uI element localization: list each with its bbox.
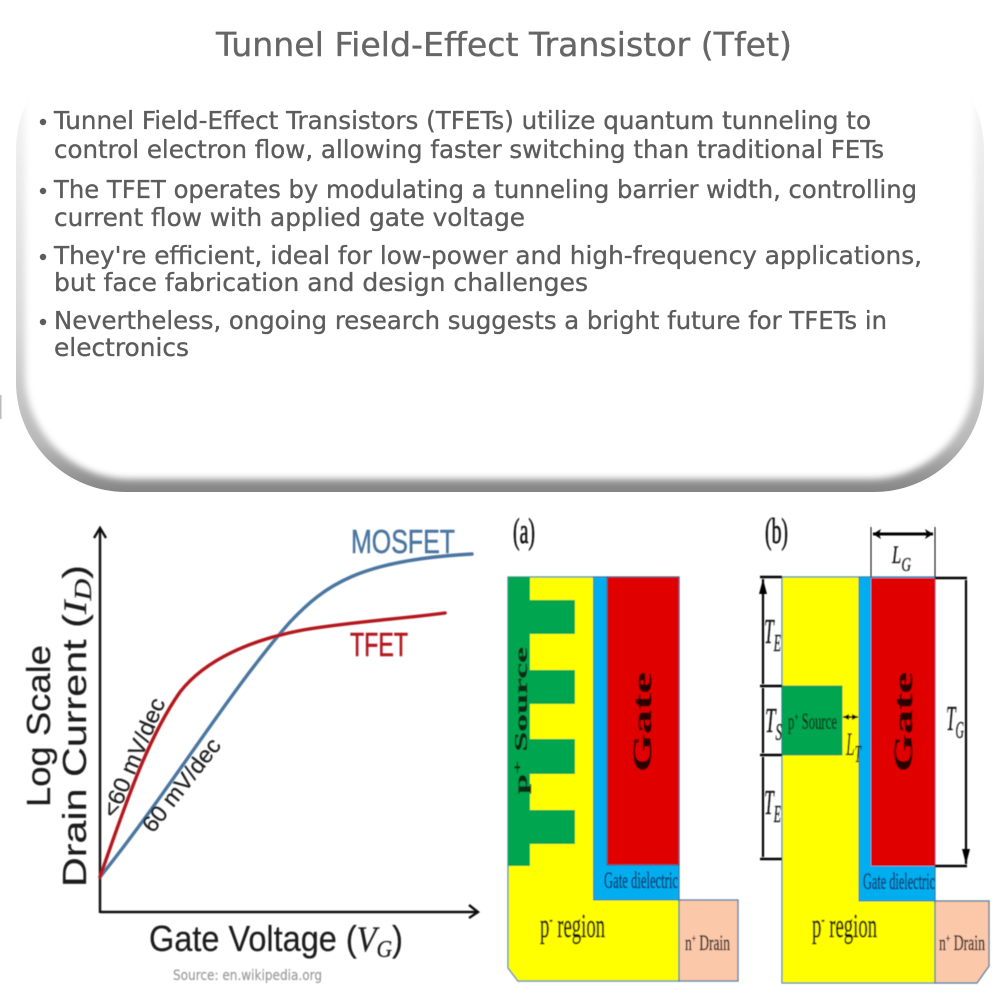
dimension: LG: L: [892, 542, 906, 569]
diagram: structure (a): [508, 511, 738, 981]
gate dielectric: [859, 577, 935, 901]
bullet 3: [40, 241, 922, 297]
p- region body: [508, 577, 679, 981]
card rim shadow: [16, 113, 984, 492]
axes: [94, 528, 478, 918]
bullet 4: Nevertheless, ongoing research suggests a bright future for TFETs in: [54, 306, 887, 335]
bullet 4: [40, 306, 887, 362]
label: gate dielectric: Gate dielectric: [604, 868, 678, 893]
label: p- region: region: [553, 908, 605, 945]
x axis label: G: [377, 937, 392, 963]
label: (b): (b): [765, 511, 788, 551]
bullet 2: [40, 175, 917, 232]
y axis label line 1: Log Scale: [20, 645, 57, 807]
label: p+ source: p: [511, 784, 531, 794]
label: gate dielectric: Gate dielectric: [863, 869, 935, 894]
bullet list: [40, 106, 922, 362]
dimension: LT: T: [855, 742, 862, 768]
source credit: Source: en.wikipedia.org: [173, 968, 322, 984]
dimension: TG: T: [946, 699, 965, 738]
n+ drain: [935, 901, 989, 983]
label: p+ source: p: [788, 709, 800, 734]
p+ source fingers: [508, 577, 575, 866]
label: n+ drain: +: [692, 931, 696, 945]
dimension: LT: L: [846, 727, 864, 763]
diagram: structure (b): G: [956, 718, 964, 744]
y axis label line 2: D: [71, 579, 97, 602]
dimension lines: [760, 527, 967, 866]
label: p- region: region: [825, 908, 877, 945]
x axis label: Gate Voltage (V: [149, 918, 379, 959]
label: gate: Gate: [628, 672, 657, 772]
label: p+ source: Source: [798, 709, 837, 734]
label: n+ drain: n: [939, 930, 950, 955]
title: Tunnel Field-Effect Transistor (Tfet): [215, 25, 792, 64]
label: p+ source: +: [510, 760, 524, 774]
dimension: TS: S: [776, 720, 782, 746]
curve: TFET: [100, 613, 445, 877]
panel: summary card: [16, 110, 984, 492]
y axis label line 2: ): [56, 565, 93, 579]
dimension: TE upper: T: [764, 612, 783, 651]
bullet 2: current flow with applied gate voltage: [54, 203, 525, 232]
dimension: TE lower: T: [764, 783, 783, 822]
label: p- region: p: [812, 908, 829, 945]
chart: drain current vs gate voltage: [20, 523, 478, 984]
dimension: TS: T: [765, 701, 784, 740]
bullet 3: but face fabrication and design challenges: [54, 268, 588, 297]
bullet 2: The TFET operates by modulating a tunneling barrier width, controlling: [53, 175, 917, 204]
label: (a): (a): [513, 511, 535, 551]
label: p- region: -: [549, 909, 553, 929]
label: p+ source: Source: [511, 647, 531, 761]
label: sub-60 slope: <60 mV/dec: [97, 694, 170, 821]
diagram: structure (b): [760, 511, 989, 983]
bullet 3: They're efficient, ideal for low-power and high-frequency applications,: [53, 241, 922, 270]
p+ source: [782, 686, 842, 755]
label: 60 slope: 60 mV/dec: [136, 733, 226, 837]
gate: [607, 577, 679, 865]
curve: MOSFET: [100, 554, 472, 877]
n+ drain: [679, 900, 738, 981]
y axis label line 2: Drain Current (I: [56, 603, 94, 887]
label: TFET: TFET: [350, 626, 408, 663]
dimension: TE upper: E: [773, 631, 781, 657]
label: p- region: p: [540, 908, 557, 945]
label: p+ source: +: [794, 709, 798, 724]
dimension: TE lower: E: [773, 802, 781, 828]
x axis label: ): [392, 918, 403, 959]
label: p- region: -: [821, 909, 825, 929]
dimension: LG: G: [901, 554, 911, 576]
label: n+ drain: +: [946, 931, 950, 945]
gate: [871, 578, 935, 866]
label: n+ drain: Drain: [696, 930, 730, 955]
bullet 1: [40, 106, 884, 164]
left edge artefact: [0, 395, 2, 419]
gate dielectric: [594, 577, 679, 900]
bullet 1: Tunnel Field-Effect Transistors (TFETs) utilize quantum tunneling to: [53, 106, 871, 135]
bullet 4: electronics: [54, 333, 189, 362]
p- region body: [782, 577, 935, 983]
label: gate: Gate: [889, 672, 918, 772]
label: MOSFET: MOSFET: [351, 523, 455, 560]
bullet 1: control electron flow, allowing faster switching than traditional FETs: [54, 135, 884, 164]
label: n+ drain: n: [685, 930, 696, 955]
